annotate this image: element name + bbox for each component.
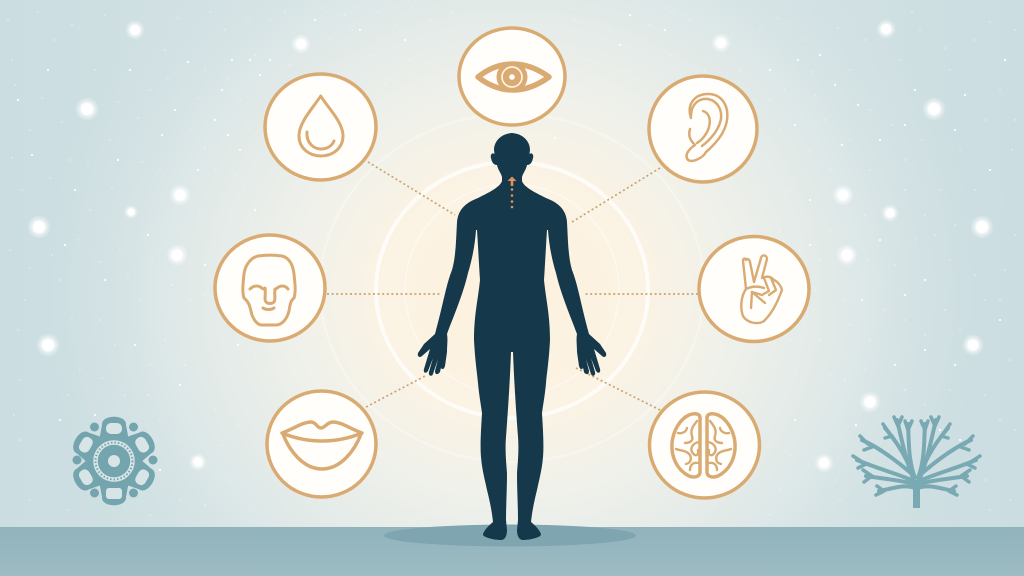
icon: ear xyxy=(649,76,757,182)
icon: hand xyxy=(699,236,809,342)
spine arrow and dots xyxy=(508,176,516,208)
mandala petal lower right xyxy=(124,458,160,496)
ground shadow xyxy=(384,524,636,546)
tree trunk xyxy=(913,480,920,508)
glowing orbs xyxy=(27,19,994,473)
dotted connector lines xyxy=(327,162,698,410)
mandala petal upper left xyxy=(68,426,104,464)
mandala petal top xyxy=(99,417,129,441)
mandala petal bottom xyxy=(99,481,129,505)
decorative mandala, bottom left xyxy=(68,417,160,505)
tree right branches xyxy=(918,417,980,495)
decorative coral tree, bottom right xyxy=(853,417,980,508)
mandala petal upper right xyxy=(124,426,160,464)
icon: brain xyxy=(650,392,760,498)
icon: eye xyxy=(459,28,565,125)
tree left branches xyxy=(853,417,915,495)
mandala petal lower left xyxy=(68,458,104,496)
ground xyxy=(0,527,1024,576)
human figure silhouette xyxy=(418,133,606,540)
icon: water drop (taste/fluid) xyxy=(265,74,376,180)
icon: lips xyxy=(267,391,376,497)
concentric halo rings xyxy=(272,78,752,498)
icon: face xyxy=(215,235,325,341)
